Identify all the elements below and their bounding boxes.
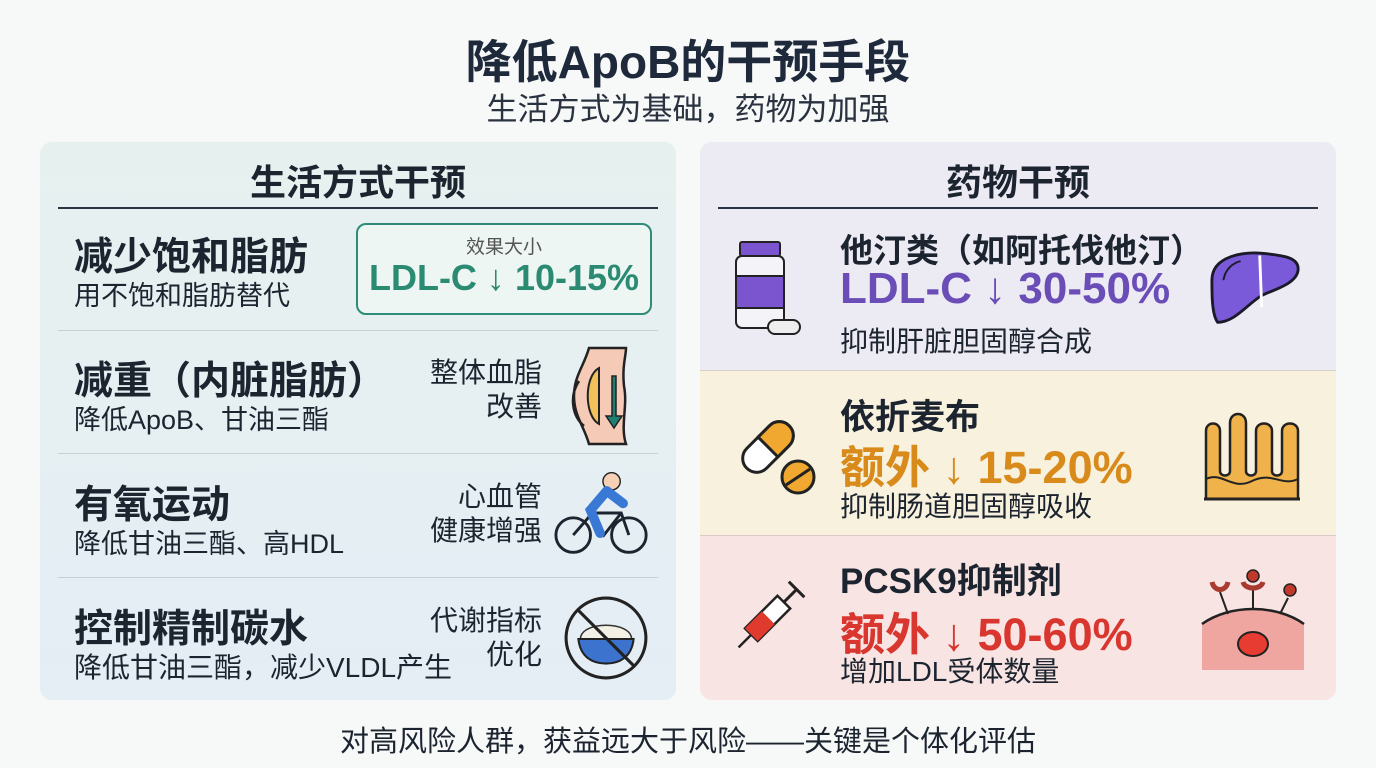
icon: no rice <box>564 596 648 680</box>
icon: pill bottle <box>735 241 801 335</box>
row: ezetimibe: 依折麦布 <box>840 398 980 437</box>
row: statins: 抑制肝脏胆固醇合成 <box>840 326 1092 357</box>
row 4: 代谢指标 <box>430 605 542 636</box>
callout: effect size <box>356 223 652 315</box>
callout: effect size: LDL-C ↓ 10-15% <box>369 257 639 298</box>
row 4: 降低甘油三酯，减少VLDL产生 <box>74 652 452 683</box>
heading: lifestyle: 生活方式干预 <box>250 162 466 203</box>
row 4: 控制精制碳水 <box>74 608 308 651</box>
row 3: 健康增强 <box>430 515 542 546</box>
footer: 对高风险人群，获益远大于风险——关键是个体化评估 <box>340 726 1036 758</box>
panel: medication <box>700 142 1336 700</box>
row 2 <box>74 346 628 446</box>
row: PCSK9: PCSK9抑制剂 <box>840 562 1062 601</box>
icon: belly <box>572 346 628 446</box>
icon: syringe <box>738 580 806 648</box>
subtitle: 生活方式为基础，药物为加强 <box>486 92 890 127</box>
row 1: 减少饱和脂肪 <box>74 236 308 279</box>
icon: intestinal villi <box>1204 412 1300 500</box>
callout: effect size: 效果大小 <box>466 237 542 258</box>
row 3: 有氧运动 <box>74 484 230 527</box>
row: PCSK9 <box>700 535 1336 700</box>
row: PCSK9: 额外 ↓ 50-60% <box>840 609 1133 660</box>
icon: liver <box>1210 252 1300 324</box>
title: 降低ApoB的干预手段 <box>466 36 910 88</box>
row: PCSK9: 增加LDL受体数量 <box>840 656 1059 687</box>
row 1: 用不饱和脂肪替代 <box>74 281 290 311</box>
row: statins <box>735 232 1300 357</box>
row 2: 减重（内脏脂肪） <box>74 360 386 403</box>
row 4: 优化 <box>486 639 542 670</box>
row 4 <box>74 596 648 683</box>
row 2: 降低ApoB、甘油三酯 <box>74 405 329 435</box>
row 2: 改善 <box>486 391 542 422</box>
icon: capsule <box>741 420 816 494</box>
heading: medication: 药物干预 <box>946 162 1090 203</box>
icon: cell receptors <box>1201 569 1305 670</box>
icon: cyclist <box>554 472 648 554</box>
row: statins: 他汀类（如阿托伐他汀） <box>840 232 1203 269</box>
row: statins: LDL-C ↓ 30-50% <box>840 264 1170 313</box>
row: ezetimibe: 抑制肠道胆固醇吸收 <box>840 491 1092 522</box>
row 3: 心血管 <box>458 481 542 512</box>
row 2: 整体血脂 <box>430 357 542 388</box>
row 3: 降低甘油三酯、高HDL <box>74 529 344 559</box>
row: ezetimibe: 额外 ↓ 15-20% <box>840 442 1133 493</box>
panel: lifestyle <box>40 142 676 700</box>
row 1 <box>74 223 652 315</box>
row: ezetimibe <box>700 370 1336 535</box>
row 3 <box>74 472 648 559</box>
